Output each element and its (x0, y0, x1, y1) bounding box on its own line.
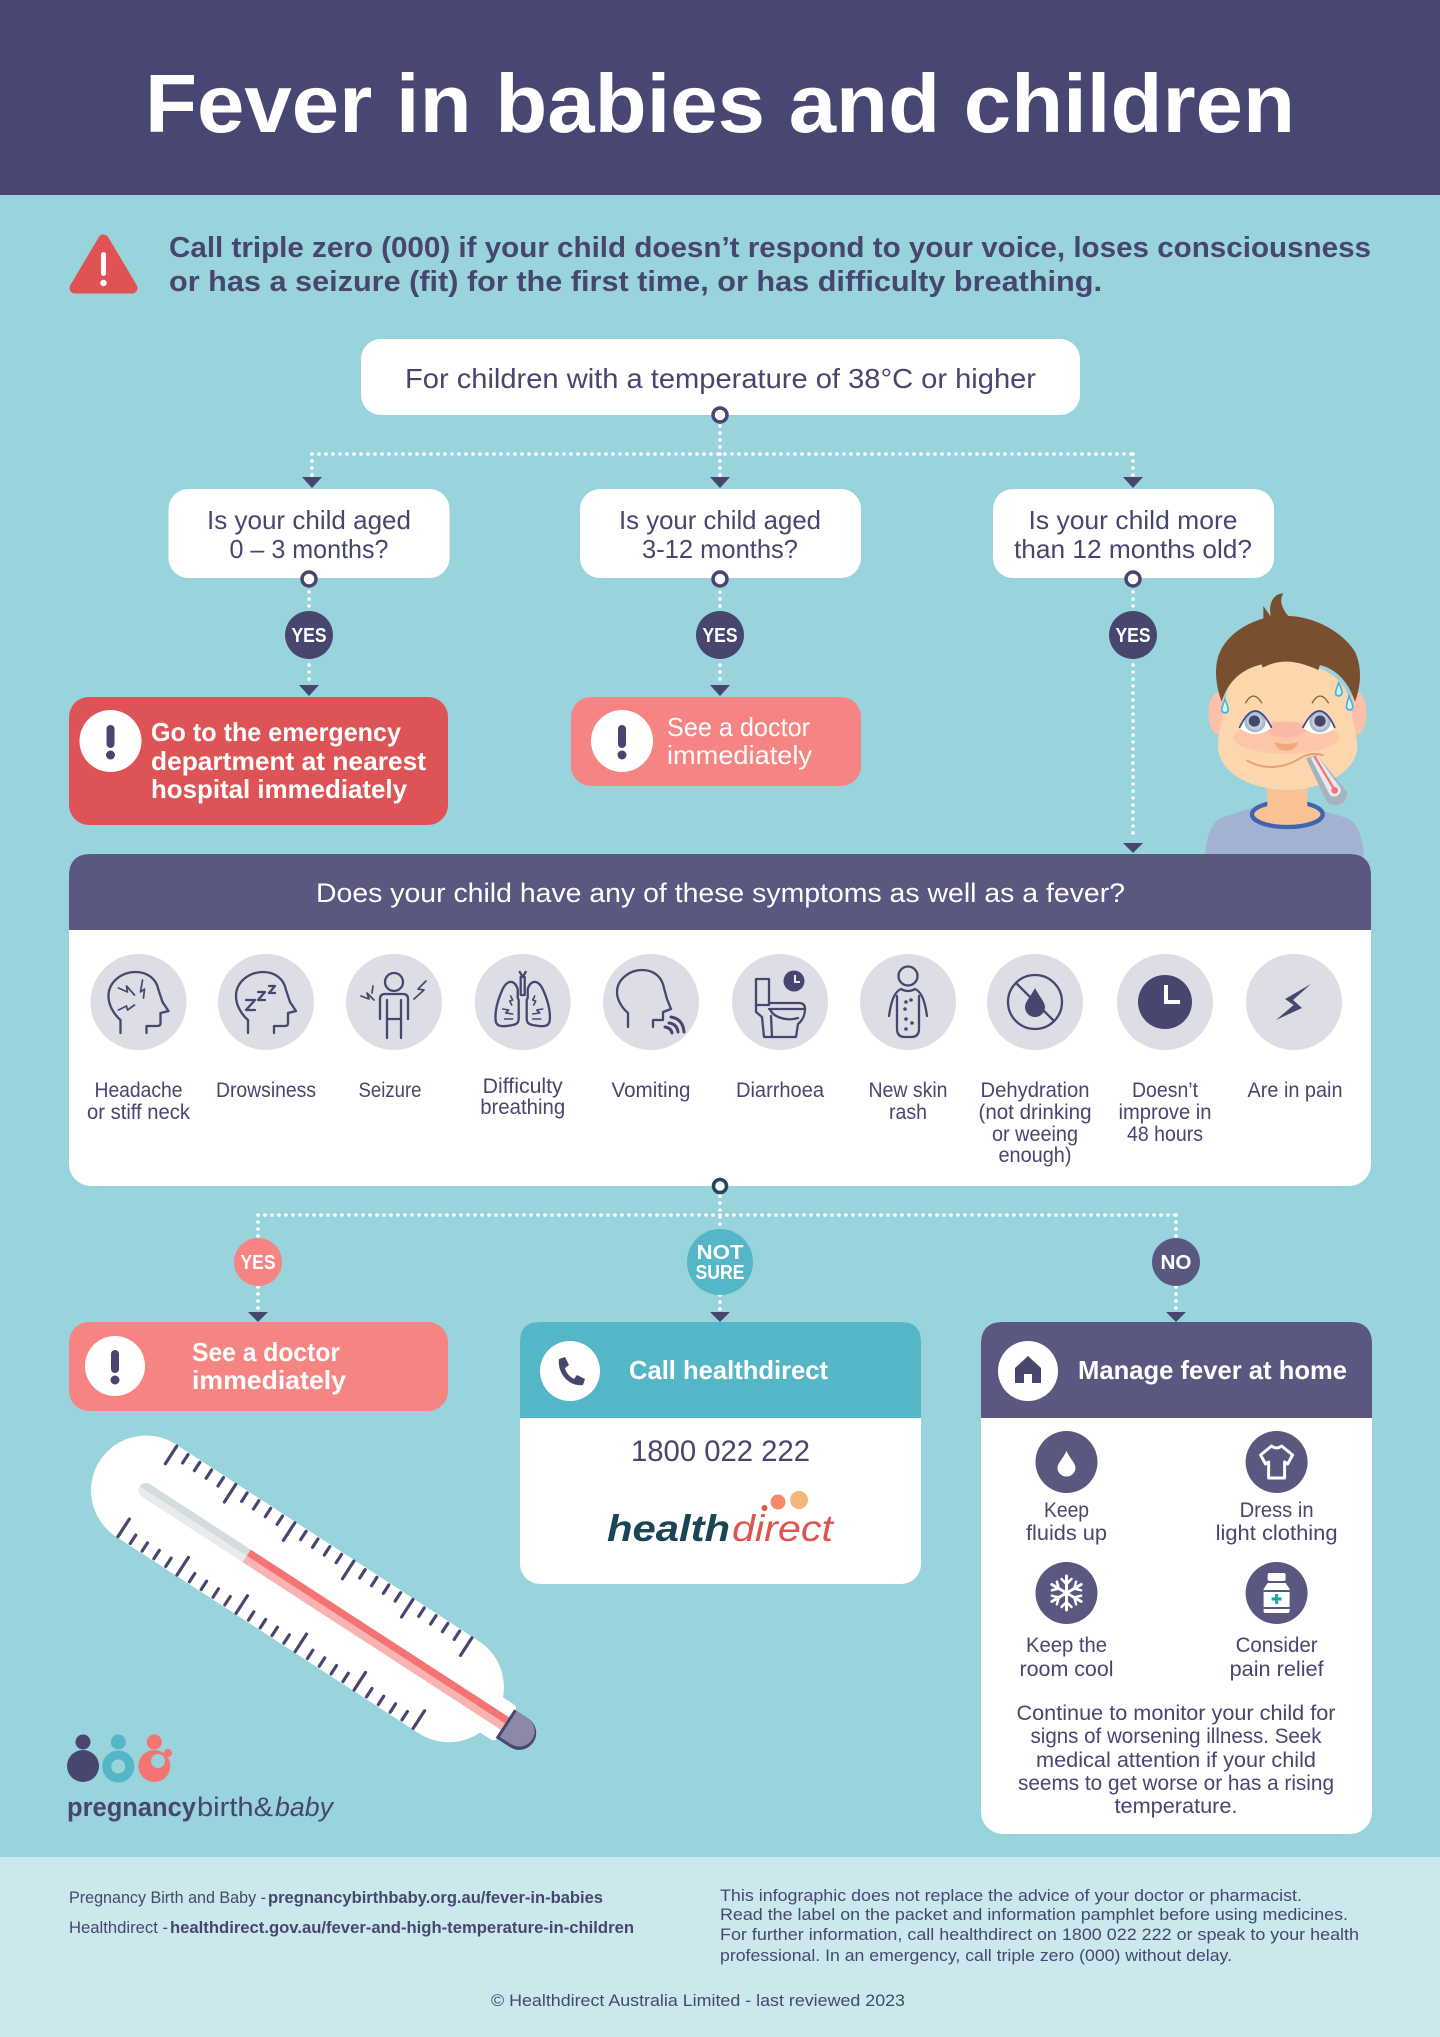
tip: dress in light clothing: light clothing (1216, 1522, 1338, 1545)
alert text (169, 232, 1371, 298)
symptom: does not improve: Doesn’t (1132, 1079, 1198, 1102)
question: over 12 months: than 12 months old? (1014, 534, 1252, 564)
alert text: or has a seizure (fit) for the first time, or has difficulty breathing. (169, 266, 1102, 298)
outcome: see a doctor (symptoms): See a doctor (192, 1337, 340, 1367)
footer links: pregnancybirthbaby.org.au/fever-in-babies (268, 1888, 603, 1907)
badge: no: NO (1160, 1252, 1192, 1274)
symptom: diarrhoea: Diarrhoea (736, 1079, 824, 1102)
disclaimer: Read the label on the packet and information pamphlet before using medicines. (720, 1905, 1348, 1924)
call heading (520, 1322, 921, 1418)
logo: pregnancy birth and baby: birth& (197, 1792, 273, 1822)
icon: warning triangle (75, 240, 132, 288)
symptom: drowsiness: Drowsiness (216, 1079, 316, 1102)
symptom: difficulty breathing: breathing (480, 1096, 565, 1119)
disclaimer: This infographic does not replace the advice of your doctor or pharmacist. (720, 1886, 1302, 1905)
monitoring advice: medical attention if your child (1036, 1749, 1316, 1772)
monitoring advice: Continue to monitor your child for (1016, 1702, 1336, 1725)
footer links: Pregnancy Birth and Baby - (69, 1888, 266, 1907)
panel: manage fever at home (981, 1322, 1372, 1834)
symptom: headache: or stiff neck (87, 1101, 190, 1124)
tip: keep the room cool: room cool (1020, 1658, 1114, 1681)
symptom: new skin rash: New skin (868, 1079, 948, 1102)
outcome: emergency department: Go to the emergency (151, 717, 402, 747)
symptom: dehydration (978, 954, 1092, 1167)
tip: keep the room cool: Keep the (1026, 1634, 1107, 1657)
disclaimer: For further information, call healthdirect on 1800 022 222 or speak to your health (720, 1925, 1359, 1944)
tip: keep the room cool (1020, 1562, 1114, 1681)
call heading: Call healthdirect (629, 1355, 828, 1385)
footer links: healthdirect.gov.au/fever-and-high-temperature-in-children (170, 1918, 634, 1937)
question: 0-3 months: Is your child aged (207, 505, 411, 535)
connectors from questions (299, 592, 1143, 853)
symptom: in pain: Are in pain (1248, 1079, 1342, 1102)
symptom: seizure: Seizure (358, 1079, 422, 1102)
symptom: difficulty breathing (475, 954, 571, 1119)
disclaimer: professional. In an emergency, call triple zero (000) without delay. (720, 1946, 1232, 1965)
tip: dress in light clothing (1216, 1431, 1338, 1545)
outcome: emergency department: hospital immediately (151, 774, 408, 804)
monitoring advice: seems to get worse or has a rising (1018, 1772, 1334, 1795)
badge: not sure: NOT (696, 1242, 744, 1264)
footer (0, 1857, 1440, 2037)
tip: keep fluids up: fluids up (1026, 1522, 1107, 1545)
symptom: does not improve: improve in (1118, 1101, 1212, 1124)
panel: symptoms (69, 854, 1371, 1186)
badge: not sure: SURE (696, 1262, 744, 1284)
logo: pregnancy birth and baby (67, 1734, 334, 1822)
question: 3-12 months: 3-12 months? (642, 534, 798, 564)
footer links: Healthdirect - (69, 1918, 168, 1937)
outcome: emergency department (69, 697, 448, 825)
illustration: large thermometer (70, 1414, 563, 1788)
yes badge 3: YES (1116, 625, 1150, 647)
healthdirect logo: health (607, 1508, 730, 1549)
logo: pregnancy birth and baby: baby (275, 1792, 334, 1822)
start box (361, 339, 1080, 422)
symptoms heading (69, 854, 1371, 930)
symptom: dehydration: (not drinking (978, 1101, 1092, 1124)
symptoms heading: Does your child have any of these symptoms as well as a fever? (316, 878, 1125, 908)
illustration: sick boy with thermometer (1205, 593, 1367, 857)
healthdirect logo (607, 1491, 835, 1549)
monitoring advice: signs of worsening illness. Seek (1030, 1725, 1322, 1748)
phone number: 1800 022 222 (631, 1435, 810, 1468)
emergency alert (75, 232, 1371, 298)
symptom: diarrhoea (732, 954, 828, 1102)
tip: consider pain relief (1230, 1562, 1324, 1681)
monitoring advice: temperature. (1114, 1795, 1238, 1818)
outcome: see a doctor: See a doctor (667, 712, 810, 742)
copyright: © Healthdirect Australia Limited - last reviewed 2023 (491, 1991, 905, 2010)
question: 0-3 months: 0 – 3 months? (230, 534, 388, 564)
healthdirect logo: direct (732, 1508, 835, 1549)
flow connectors: bottom (248, 1180, 1186, 1322)
symptom: drowsiness (216, 954, 316, 1102)
yes badge 3 (1109, 611, 1157, 659)
symptom: dehydration: enough) (998, 1144, 1072, 1167)
tip: keep fluids up (1026, 1431, 1107, 1545)
yes badge 1: YES (292, 625, 326, 647)
question: 0-3 months (168, 489, 450, 586)
panel: call healthdirect (520, 1322, 921, 1584)
symptom: does not improve: 48 hours (1127, 1123, 1203, 1146)
manage heading: Manage fever at home (1078, 1355, 1347, 1385)
yes badge 1 (285, 611, 333, 659)
monitoring advice (1016, 1702, 1336, 1818)
question: over 12 months (993, 489, 1274, 586)
tip: consider pain relief: pain relief (1230, 1658, 1324, 1681)
disclaimer (720, 1886, 1359, 1965)
tip: consider pain relief: Consider (1236, 1634, 1318, 1657)
symptom: seizure (346, 954, 442, 1102)
header banner (0, 0, 1440, 195)
yes badge 2 (696, 611, 744, 659)
symptom: headache: Headache (94, 1079, 182, 1102)
symptom: vomiting: Vomiting (612, 1079, 690, 1102)
start box: For children with a temperature of 38°C or higher (405, 363, 1036, 394)
title: Fever in babies and children (145, 57, 1295, 150)
symptom: dehydration: Dehydration (980, 1079, 1090, 1102)
question: 3-12 months (580, 489, 861, 586)
symptom: dehydration: or weeing (992, 1123, 1078, 1146)
badge: yes (234, 1238, 282, 1286)
symptom: new skin rash (860, 954, 956, 1124)
alert text: Call triple zero (000) if your child doesn’t respond to your voice, loses consciousness (169, 232, 1371, 264)
badge: no (1152, 1238, 1200, 1286)
logo: pregnancy birth and baby: pregnancy (67, 1792, 196, 1822)
badge: not sure (687, 1229, 753, 1295)
symptom: headache (87, 954, 190, 1124)
symptom: vomiting (603, 954, 699, 1102)
symptom: difficulty breathing: Difficulty (483, 1075, 563, 1098)
question: 3-12 months: Is your child aged (619, 505, 821, 535)
footer links (69, 1888, 634, 1937)
symptom: does not improve (1117, 954, 1213, 1146)
outcome: see a doctor: immediately (667, 740, 812, 770)
yes badge 2: YES (702, 625, 738, 647)
symptom: new skin rash: rash (889, 1101, 927, 1124)
tip: dress in light clothing: Dress in (1240, 1499, 1314, 1522)
outcome: see a doctor (symptoms) (69, 1322, 448, 1411)
outcome: see a doctor (571, 697, 861, 786)
tip: keep fluids up: Keep (1044, 1499, 1089, 1522)
outcome: see a doctor (symptoms): immediately (192, 1365, 347, 1395)
manage heading (981, 1322, 1372, 1418)
question: over 12 months: Is your child more (1028, 505, 1238, 535)
symptom: in pain (1246, 954, 1342, 1102)
outcome: emergency department: department at nearest (151, 746, 426, 776)
badge: yes: YES (240, 1252, 276, 1274)
flow connectors: top (302, 426, 1143, 488)
